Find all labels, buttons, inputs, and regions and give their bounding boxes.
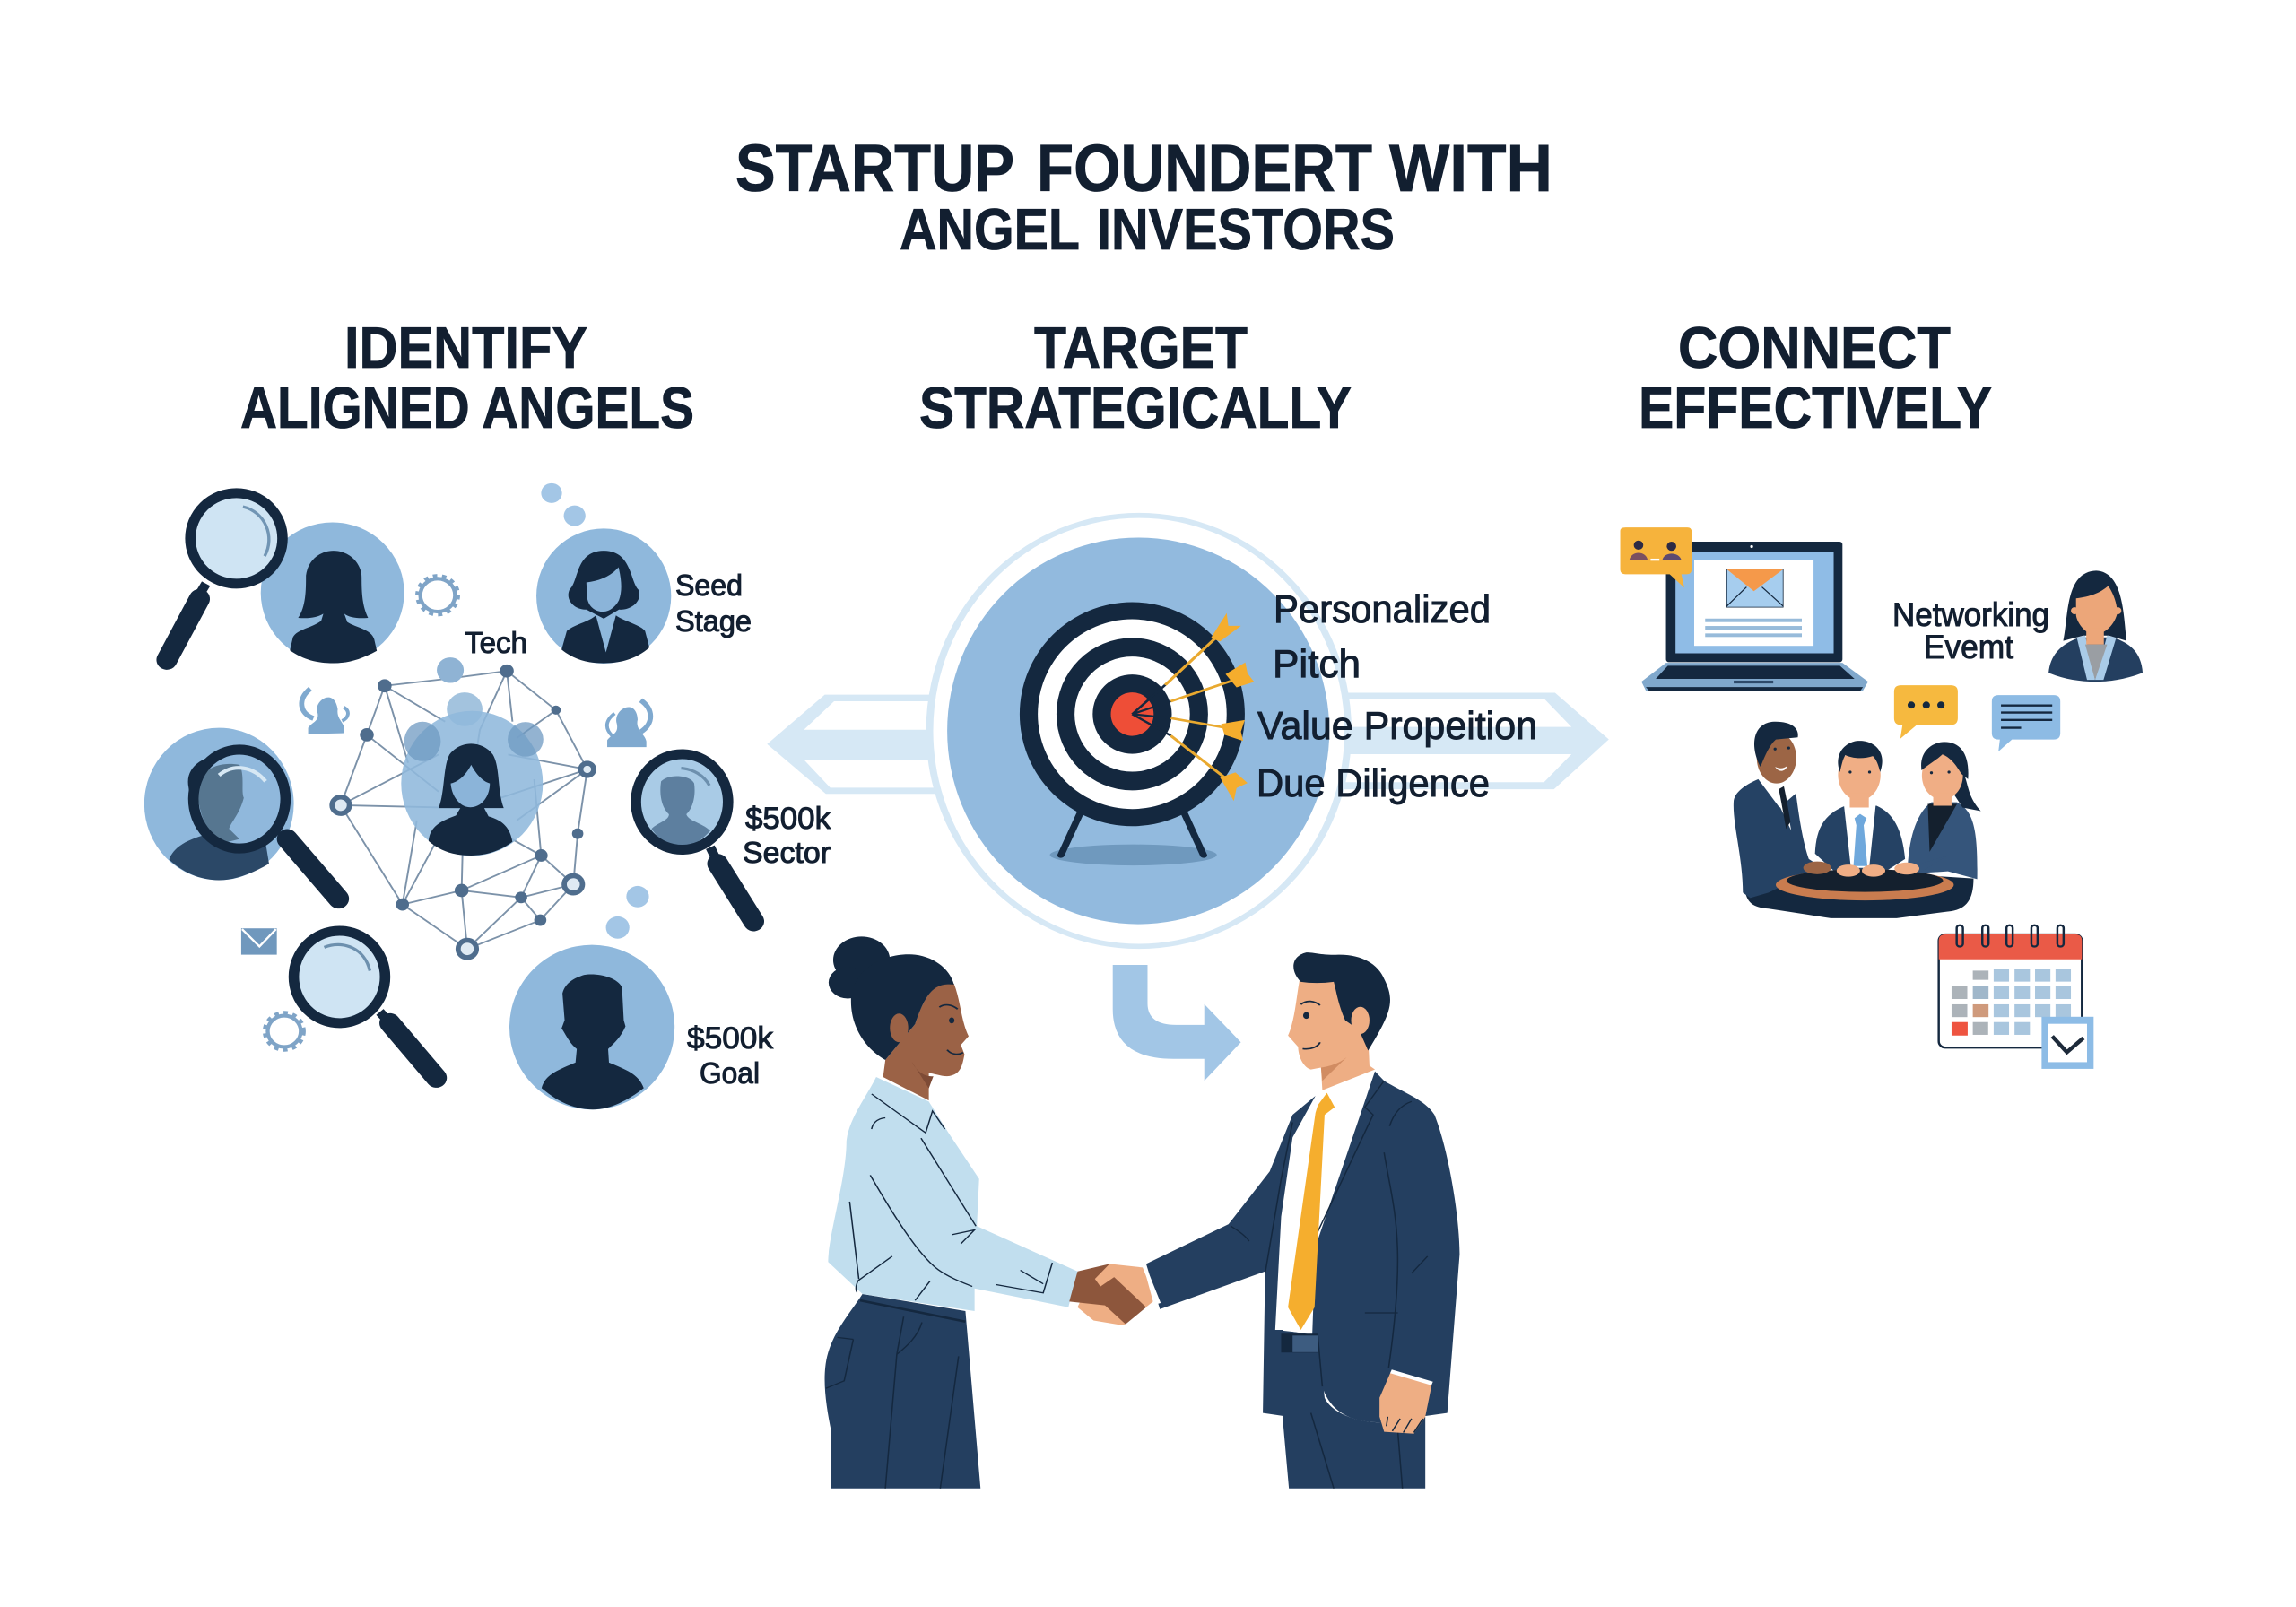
labels: identify panel: Goal	[700, 1056, 760, 1090]
tie	[1288, 1093, 1335, 1330]
heading: connect effectively: EFFECTIVELY	[1639, 375, 1992, 440]
heading: connect effectively	[1639, 315, 1992, 440]
shirt	[828, 1077, 1077, 1311]
title: ANGEL	[900, 196, 1080, 262]
arrows in target	[1132, 637, 1237, 778]
heading: identify aligned angels: IDENTIFY	[344, 315, 587, 380]
handshake scene	[825, 936, 1459, 1489]
woman	[1908, 803, 1978, 879]
labels: identify panel: Seed	[675, 569, 743, 602]
blue disc	[947, 537, 1329, 925]
panel: target strategically	[767, 516, 1609, 946]
arrow: right double outline	[1325, 693, 1609, 789]
icon: networking woman	[2048, 570, 2143, 682]
pants	[1281, 1330, 1425, 1489]
labels: identify panel: $500k	[687, 1021, 774, 1055]
avatar: magnifier with silhouette	[636, 754, 753, 921]
icon: laptop	[1641, 542, 1868, 691]
check badge	[2041, 1017, 2093, 1069]
arrow: left double outline	[767, 695, 935, 794]
handshake	[1069, 1264, 1159, 1325]
table	[1776, 869, 1953, 900]
magnifier: lower left	[294, 931, 437, 1078]
icon: listening persons	[301, 689, 650, 747]
labels: identify panel	[465, 569, 831, 1090]
avatar: man under magnifier	[144, 728, 339, 899]
labels: target tactics: Personalized	[1274, 587, 1491, 631]
panel: connect effectively	[1621, 527, 2143, 1069]
hair and bun	[833, 936, 890, 984]
heading: connect effectively: CONNECT	[1678, 315, 1951, 380]
title: STARTUP	[735, 131, 1014, 205]
heading: identify aligned angels: ALIGNED ANGELS	[240, 375, 694, 440]
icon: bullseye target	[1020, 602, 1254, 865]
group of three at table	[1734, 722, 1981, 918]
neck and face	[883, 984, 969, 1100]
heading: target strategically	[919, 315, 1352, 440]
label: networking event: Networking	[1892, 596, 2049, 633]
title: INVESTORS	[1097, 196, 1395, 262]
arrow: curved to investor	[1113, 965, 1241, 1081]
label: networking event: Evemt	[1924, 629, 2014, 665]
title: FOUNDERT	[1037, 131, 1372, 205]
decorative dots	[541, 483, 649, 939]
icon: video chat bubble	[1621, 527, 1692, 587]
pants	[825, 1294, 980, 1489]
icon: envelope	[241, 928, 277, 955]
jacket	[1146, 1096, 1316, 1416]
avatar: woman with bob hair	[536, 528, 671, 664]
labels: target tactics: Pitch	[1273, 642, 1361, 686]
labels: identify panel: $500k	[745, 802, 831, 836]
labels: identify panel: Sector	[743, 836, 831, 869]
heading: target strategically: TARGET	[1034, 315, 1248, 380]
label: networking event	[1892, 596, 2049, 665]
hair	[1293, 952, 1390, 1051]
panel: identify aligned angels	[144, 483, 753, 1109]
lower bodies	[1744, 872, 1973, 918]
labels: target tactics: Due Diligence	[1257, 761, 1490, 805]
avatar: man silhouette	[509, 945, 674, 1109]
left man	[1734, 779, 1831, 898]
investor: man	[1146, 952, 1459, 1489]
hand on side	[1379, 1371, 1432, 1434]
icon: calendar	[1939, 925, 2093, 1069]
labels: identify panel: Stage	[675, 604, 752, 638]
shirt	[1275, 1070, 1375, 1334]
labels: target tactics: Value Propeition	[1257, 704, 1537, 748]
network graph	[332, 657, 594, 958]
avatar: woman with long hair and magnifier	[167, 493, 404, 663]
belt	[1281, 1333, 1318, 1352]
heading: target strategically: STRATEGICALLY	[919, 375, 1352, 440]
face	[1288, 981, 1375, 1090]
icon: blue speech bubble	[1992, 695, 2060, 751]
icon: gears	[265, 576, 458, 1050]
labels: identify panel: Tech	[465, 626, 527, 659]
hands	[1804, 862, 1831, 874]
heading: identify aligned angels	[240, 315, 694, 440]
nodes	[360, 665, 583, 925]
labels: target tactics	[1257, 587, 1537, 805]
founder: woman	[825, 936, 1077, 1489]
icon: yellow speech bubble	[1894, 685, 1958, 739]
central person	[429, 743, 512, 856]
centre man	[1815, 806, 1905, 872]
ring around target	[930, 516, 1348, 946]
title	[735, 131, 1552, 262]
title: WITH	[1389, 131, 1552, 205]
